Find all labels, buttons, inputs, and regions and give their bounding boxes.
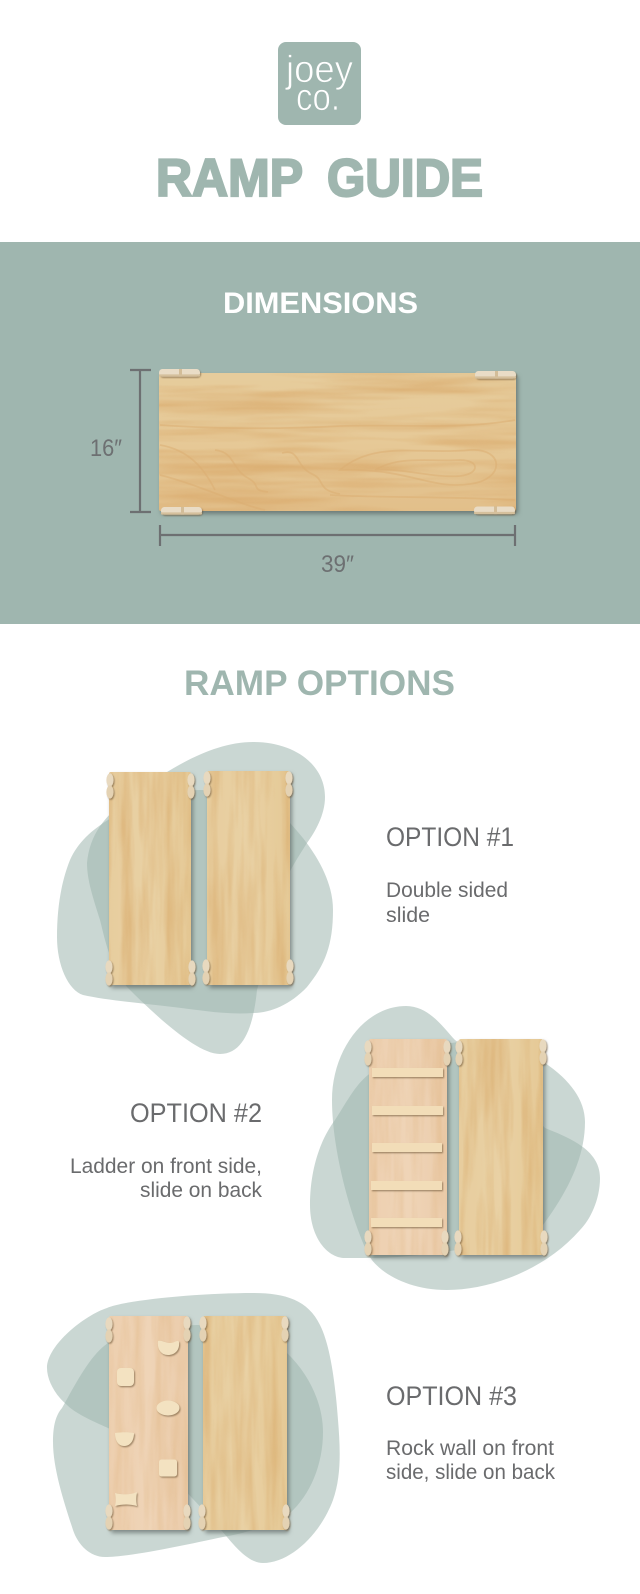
option 3 ramp boards [105,1316,290,1530]
option 2 text [70,1098,262,1202]
option 3 text: Rock wall on front [386,1437,554,1460]
option 2 text: Ladder on front side, [70,1155,262,1178]
title [156,149,483,208]
ladder side [364,1039,451,1256]
title: GUIDE [327,149,483,208]
option 2 ramp boards [364,1039,548,1256]
option 3 text: OPTION #3 [386,1381,517,1411]
slide side [454,1039,548,1256]
slide side [198,1316,290,1530]
heading: dimensions: DIMENSIONS [223,287,418,320]
option 2 text: OPTION #2 [130,1098,262,1128]
option 3 text [386,1381,555,1484]
option 1 text: OPTION #1 [386,822,514,852]
option 3 text: side, slide on back [386,1461,555,1484]
panel: dimensions [0,242,640,624]
option 2 blobs [310,1006,600,1290]
logo [278,42,361,125]
logo: co. [296,77,340,119]
height label: 16″ [90,435,122,462]
height dimension line [130,370,151,512]
option 1 ramp boards [105,771,294,986]
title: RAMP [156,149,303,208]
width dimension line [160,525,515,546]
option 1 text: Double sided [386,879,508,902]
width label: 39″ [321,551,354,578]
option 3 blobs [47,1293,340,1563]
heading: ramp options: RAMP OPTIONS [184,664,455,703]
ramp board with dimensions [159,369,516,515]
logo: joey [285,49,353,91]
option 1 text [386,822,514,927]
option 1 blobs [57,742,333,1054]
option 2 text: slide on back [140,1179,262,1202]
option 1 text: slide [386,904,430,927]
rock wall side [105,1316,191,1530]
